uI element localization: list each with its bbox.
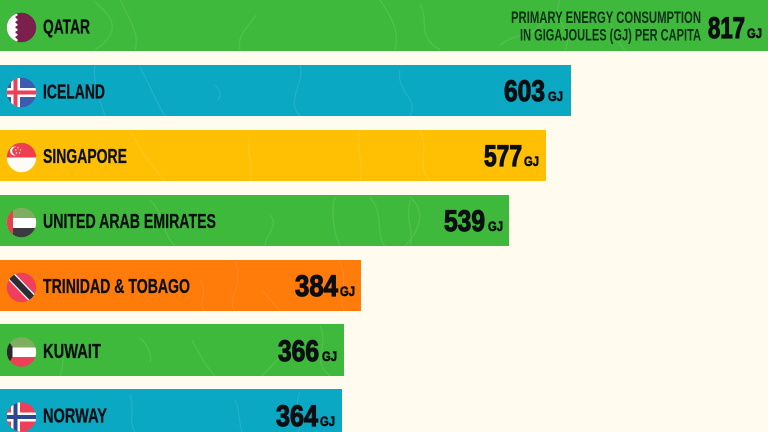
value: Iceland 603 GJ: GJ — [548, 88, 563, 104]
value: Kuwait 366 GJ: 366 — [278, 335, 319, 368]
value: United Arab Emirates 539 GJ: GJ — [488, 218, 503, 234]
value: Trinidad & Tobago 384 GJ: GJ — [340, 283, 355, 299]
value: Kuwait 366 GJ: GJ — [322, 348, 337, 364]
bar row: Qatar — [0, 0, 768, 51]
label: Singapore: SINGAPORE — [43, 145, 127, 168]
bar row: Kuwait — [0, 324, 344, 376]
bar row: Norway — [0, 389, 342, 432]
bar row: United Arab Emirates — [0, 195, 509, 246]
flag: Singapore — [6, 142, 36, 172]
flag: Qatar — [6, 12, 36, 42]
label: United Arab Emirates: UNITED ARAB EMIRATES — [43, 210, 216, 233]
value: Trinidad & Tobago 384 GJ: 384 — [295, 270, 338, 303]
value: Norway 364 GJ: GJ — [320, 413, 335, 429]
flag: United Arab Emirates — [6, 208, 36, 238]
bar row: Trinidad & Tobago — [0, 260, 361, 311]
bar row: Iceland — [0, 65, 571, 116]
chart title — [511, 8, 701, 44]
value: Singapore 577 GJ: GJ — [524, 153, 539, 169]
value: Iceland 603 GJ: 603 — [504, 75, 545, 108]
value: United Arab Emirates 539 GJ: 539 — [444, 205, 485, 238]
flag: Trinidad & Tobago — [6, 272, 36, 302]
label: Trinidad & Tobago: TRINIDAD & TOBAGO — [43, 275, 190, 298]
value: Qatar 817 GJ: GJ — [747, 25, 762, 41]
label: Iceland: ICELAND — [43, 80, 105, 104]
flag: Norway — [6, 402, 38, 432]
flag: Iceland — [6, 78, 36, 108]
label: Kuwait: KUWAIT — [43, 340, 101, 363]
flag: Kuwait — [6, 337, 38, 368]
label: Norway: NORWAY — [43, 404, 107, 428]
value: Qatar 817 GJ: 817 — [708, 12, 745, 45]
value: Singapore 577 GJ: 577 — [484, 140, 522, 173]
bar row: Singapore — [0, 130, 546, 181]
label: Qatar: QATAR — [43, 16, 90, 38]
